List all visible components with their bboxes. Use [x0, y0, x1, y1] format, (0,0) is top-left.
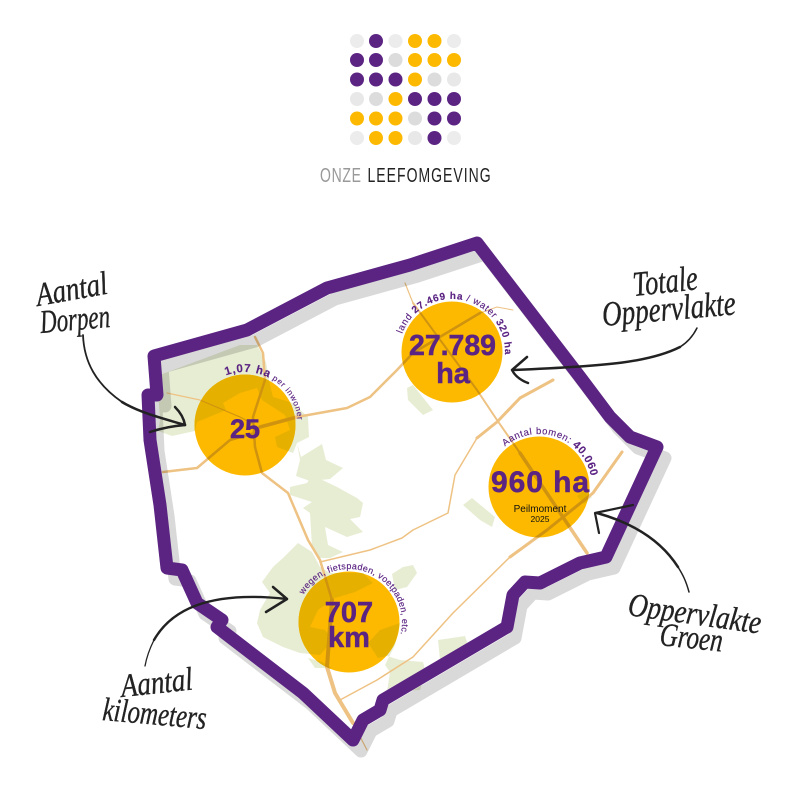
map: roads	[163, 283, 622, 750]
label: aantal dorpen: Aantal	[32, 266, 110, 314]
map: border shadow	[156, 254, 665, 751]
map details showing through the discs	[194, 312, 589, 669]
label: aantal kilometers	[101, 662, 208, 737]
label: totale oppervlakte	[600, 258, 737, 334]
stat: oppervlakte groen	[491, 427, 598, 524]
label: oppervlakte groen: Groen	[658, 617, 725, 660]
logo: dot grid	[350, 34, 461, 145]
arrow: aantal kilometers	[145, 587, 287, 666]
stat: oppervlakte groen: 960 ha	[491, 466, 589, 499]
title: LEEFOMGEVING	[368, 163, 491, 187]
label: aantal dorpen	[32, 266, 111, 341]
stat: totale oppervlakte: land 27.469 ha / water 320 ha	[396, 292, 512, 355]
stat: oppervlakte groen: 2025	[531, 514, 550, 524]
label: totale oppervlakte: Totale	[631, 258, 699, 304]
label: oppervlakte groen: Oppervlakte	[626, 587, 764, 642]
label: aantal kilometers: kilometers	[101, 692, 208, 737]
stat: oppervlakte groen: Aantal bomen: 40.060	[503, 427, 598, 475]
yellow discs	[194, 302, 590, 672]
stat: aantal kilometers: wegen, fietspaden, voetpaden, etc.	[299, 564, 408, 634]
map: green areas	[157, 345, 592, 692]
stat: aantal dorpen: 1,07 ha per inwoner	[224, 364, 302, 420]
stat: totale oppervlakte	[396, 292, 512, 390]
label: oppervlakte groen	[626, 587, 764, 660]
label: aantal kilometers: Aantal	[117, 662, 194, 705]
title: ONZE	[320, 163, 361, 187]
stat: aantal kilometers: 707	[325, 597, 373, 629]
map: purple municipality border	[148, 243, 657, 740]
arrow: aantal dorpen	[83, 335, 185, 432]
arrow: totale oppervlakte	[512, 328, 697, 383]
label: totale oppervlakte: Oppervlakte	[600, 283, 737, 334]
stat: totale oppervlakte: 27.789	[409, 330, 496, 362]
stat: aantal kilometers: km	[328, 622, 370, 654]
stat: totale oppervlakte: ha	[436, 358, 471, 390]
stat: oppervlakte groen: Peilmoment	[514, 504, 567, 515]
label: aantal dorpen: Dorpen	[38, 299, 111, 341]
arrow: oppervlakte groen	[595, 505, 689, 592]
stat: aantal dorpen	[224, 364, 302, 444]
stat: aantal dorpen: 25	[230, 414, 260, 444]
